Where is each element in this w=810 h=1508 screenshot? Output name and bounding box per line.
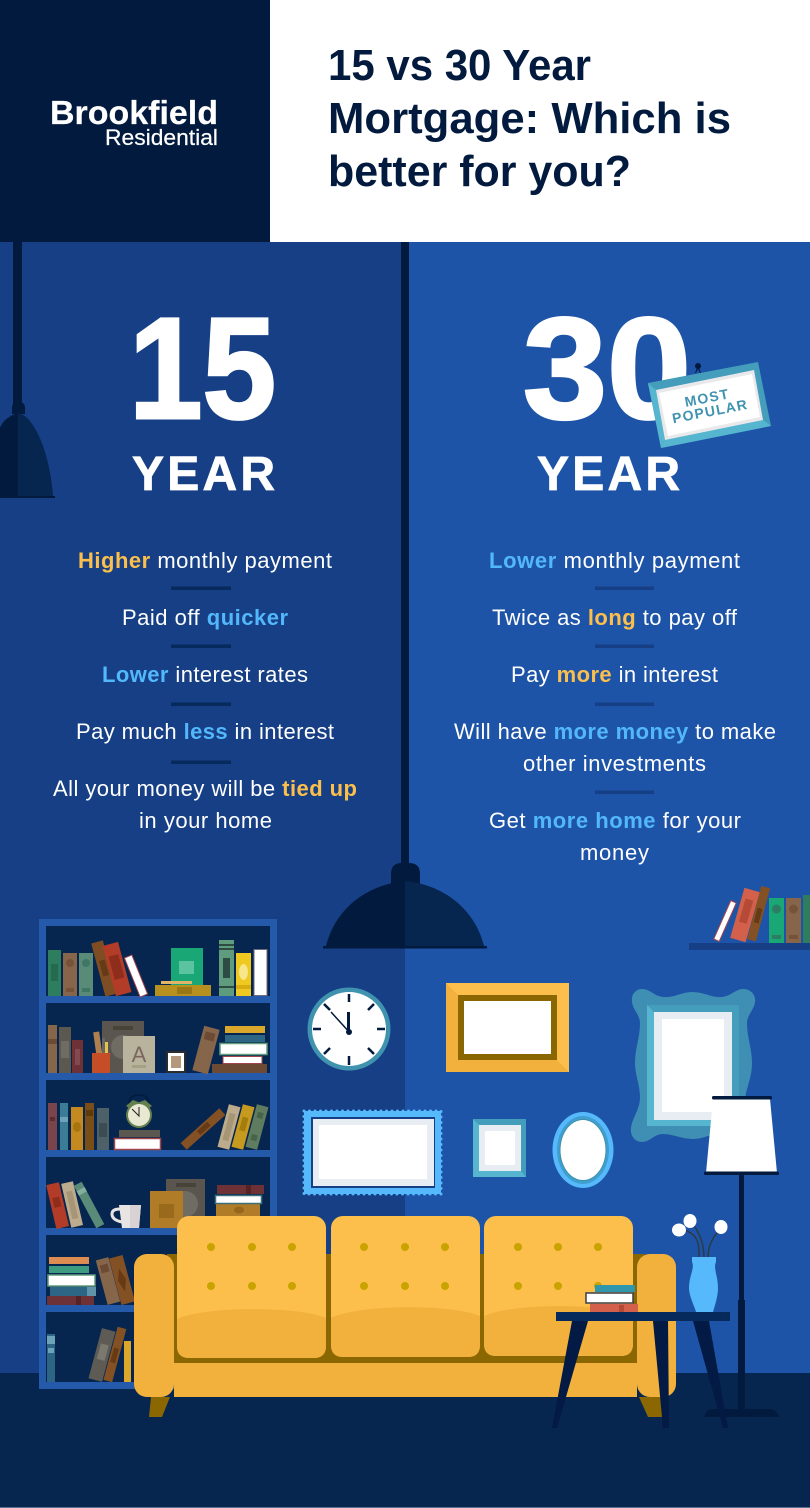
- vase with flowers: [672, 1214, 728, 1312]
- sign frame: [648, 362, 771, 448]
- floor lamp: [704, 1096, 779, 1417]
- sofa cushion 2: [331, 1216, 480, 1357]
- list: 30 year points: Lower monthly payment: [489, 548, 740, 573]
- side table: [552, 1312, 730, 1428]
- shelf 1 books: [48, 940, 267, 997]
- list: 15 year points: [53, 548, 357, 833]
- sign text: POPULAR: [671, 396, 749, 426]
- table books: [586, 1285, 638, 1312]
- sofa: [134, 1216, 676, 1417]
- title: better for you?: [328, 147, 631, 196]
- heading: 15 year: 15: [129, 288, 276, 449]
- shelf 5 books: [47, 1255, 135, 1305]
- shelf 2 books and ornaments: [48, 1021, 267, 1074]
- wavy blue picture frame: [631, 989, 755, 1142]
- gold picture frame: [446, 983, 569, 1072]
- list: 30 year points: other investments: [523, 751, 706, 776]
- title: Mortgage: Which is: [328, 94, 731, 143]
- list: 15 year points: All your money will be tied up: [53, 776, 357, 801]
- list: 30 year points: money: [580, 840, 649, 865]
- shelf 4 books and coffee cup: [46, 1179, 264, 1229]
- list: 15 year points: in your home: [139, 808, 272, 833]
- logo wordmark: [50, 94, 218, 150]
- title: [328, 41, 731, 196]
- heading: 15 year: YEAR: [132, 448, 275, 501]
- heading: 30 year: 30: [523, 288, 691, 449]
- title: 15 vs 30 Year: [328, 41, 591, 90]
- wall shelf with books: [689, 886, 810, 950]
- wall clock: [308, 988, 390, 1070]
- shelf 6 books: [47, 1327, 131, 1382]
- logo wordmark: Residential: [105, 125, 218, 150]
- sofa cushion 1: [177, 1216, 326, 1358]
- small teal picture frame: [473, 1119, 526, 1177]
- shelf 3 books and alarm clock: [48, 1095, 268, 1150]
- logo wordmark: Brookfield: [50, 94, 218, 131]
- sofa cushion 3: [484, 1216, 633, 1356]
- list: 30 year points: Will have more money to make: [454, 719, 776, 744]
- list: 30 year points: [454, 548, 776, 865]
- list: 30 year points: Pay more in interest: [511, 662, 718, 687]
- list: 15 year points: Pay much less in interest: [76, 719, 334, 744]
- sign text: MOST: [683, 385, 731, 410]
- list: 15 year points: Paid off quicker: [122, 605, 288, 630]
- hanging lamp centre: [323, 242, 487, 948]
- heading: 30 year: YEAR: [537, 448, 680, 501]
- most popular sign: [648, 362, 771, 448]
- list: 15 year points: Lower interest rates: [102, 662, 308, 687]
- bookshelf: [39, 919, 277, 1389]
- list: 30 year points: Twice as long to pay off: [492, 605, 738, 630]
- header title panel: [270, 0, 810, 242]
- sign nail: [695, 363, 701, 373]
- scalloped blue picture frame: [304, 1111, 441, 1194]
- hanging lamp left: [0, 242, 55, 498]
- list: 15 year points: Higher monthly payment: [78, 548, 332, 573]
- oval mirror: [552, 1112, 614, 1188]
- sofa frame: [134, 1254, 676, 1397]
- header logo panel: [0, 0, 270, 242]
- list: 30 year points: Get more home for your: [489, 808, 741, 833]
- shelf 2 books and ornaments: A: [132, 1042, 147, 1067]
- sofa legs: [149, 1397, 663, 1417]
